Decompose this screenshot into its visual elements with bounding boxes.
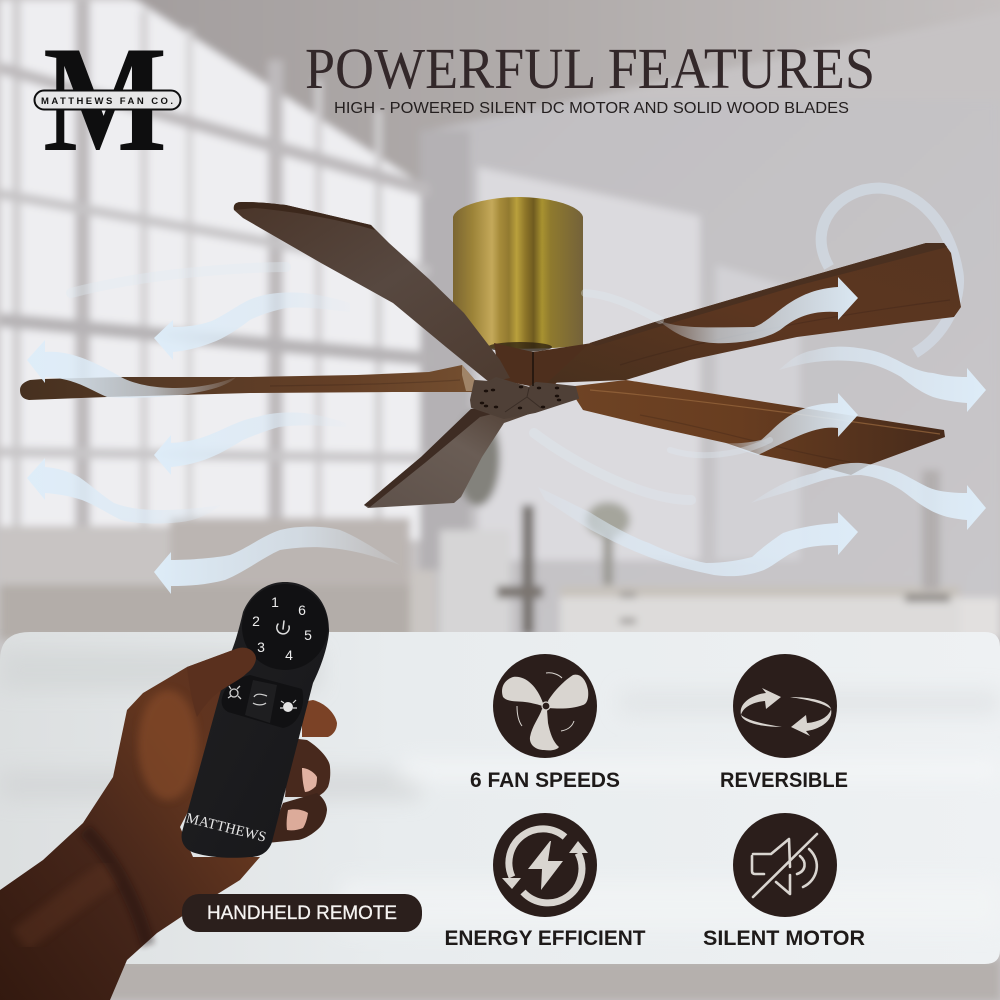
- arrow: bottom left: [154, 527, 400, 594]
- remote numbers: 2: [252, 613, 260, 629]
- hub wood block: [494, 343, 592, 390]
- remote numbers: 3: [257, 639, 265, 655]
- arrow: middle right: [726, 393, 858, 455]
- arrow: lower right: [538, 487, 858, 576]
- arrow: left middle: [154, 412, 346, 475]
- remote: [182, 582, 329, 858]
- logo: [34, 15, 180, 183]
- air flow arrows: [27, 267, 986, 594]
- logo wordmark: MATTHEWS FAN CO.: [41, 96, 173, 107]
- icon: fan: [493, 654, 597, 758]
- label: 6 FAN SPEEDS: [470, 769, 620, 792]
- hand holding remote: [0, 650, 337, 1000]
- panel: features: [0, 632, 1000, 964]
- blade: lower: [364, 408, 532, 508]
- feature: reversible: [720, 654, 848, 792]
- icon: energy cycle: [493, 813, 597, 917]
- label: SILENT MOTOR: [703, 927, 865, 950]
- fingers: [267, 700, 337, 843]
- title: POWERFUL FEATURES: [305, 36, 875, 101]
- faint air bands: [71, 267, 770, 500]
- remote buttons: [222, 675, 303, 728]
- palm and wrist: [0, 650, 260, 1000]
- swirl air behind blade: [821, 188, 959, 353]
- icon: rotation arrows: [733, 654, 837, 758]
- wrist shadow: [85, 830, 148, 945]
- remote numbers: 5: [304, 627, 312, 643]
- blade: upper left: [234, 202, 510, 382]
- arrow: far left lower: [27, 458, 221, 524]
- subtitle: HIGH - POWERED SILENT DC MOTOR AND SOLID WOOD BLADES: [334, 100, 849, 117]
- remote label pill: HANDHELD REMOTE: [207, 903, 397, 924]
- arrow: far right lower: [751, 463, 986, 530]
- feature: energy efficient: [444, 813, 646, 950]
- logo band: [34, 90, 180, 110]
- remote power icon: [277, 621, 289, 634]
- arrow: left top: [154, 292, 350, 360]
- remote brand: MATTHEWS: [184, 810, 268, 846]
- thumb: [187, 648, 256, 717]
- fan blades: [20, 202, 961, 508]
- label: ENERGY EFFICIENT: [444, 927, 646, 950]
- remote numbers: [252, 594, 312, 663]
- arrow: upper right: [658, 277, 858, 343]
- blade: right lower: [572, 380, 945, 475]
- feature: silent motor: [703, 813, 865, 950]
- arrow: far right upper: [779, 347, 986, 412]
- arrow: far left: [27, 340, 236, 398]
- palm highlight: [138, 690, 198, 800]
- blade: right upper: [547, 243, 961, 383]
- fan motor: [453, 197, 583, 352]
- remote label pill: [182, 894, 422, 932]
- remote numbers: 1: [271, 594, 279, 610]
- blade: left: [20, 365, 478, 400]
- wood grain: [270, 300, 950, 462]
- remote body: [182, 582, 329, 858]
- label: REVERSIBLE: [720, 769, 848, 792]
- forearm highlight: [20, 870, 115, 940]
- icon: muted speaker: [733, 813, 837, 917]
- remote numbers: 4: [285, 647, 293, 663]
- logo monogram: M: [43, 15, 167, 183]
- remote numbers: 6: [298, 602, 306, 618]
- hub: [471, 378, 578, 418]
- remote dial: [242, 584, 328, 670]
- feature: 6 fan speeds: [470, 654, 620, 792]
